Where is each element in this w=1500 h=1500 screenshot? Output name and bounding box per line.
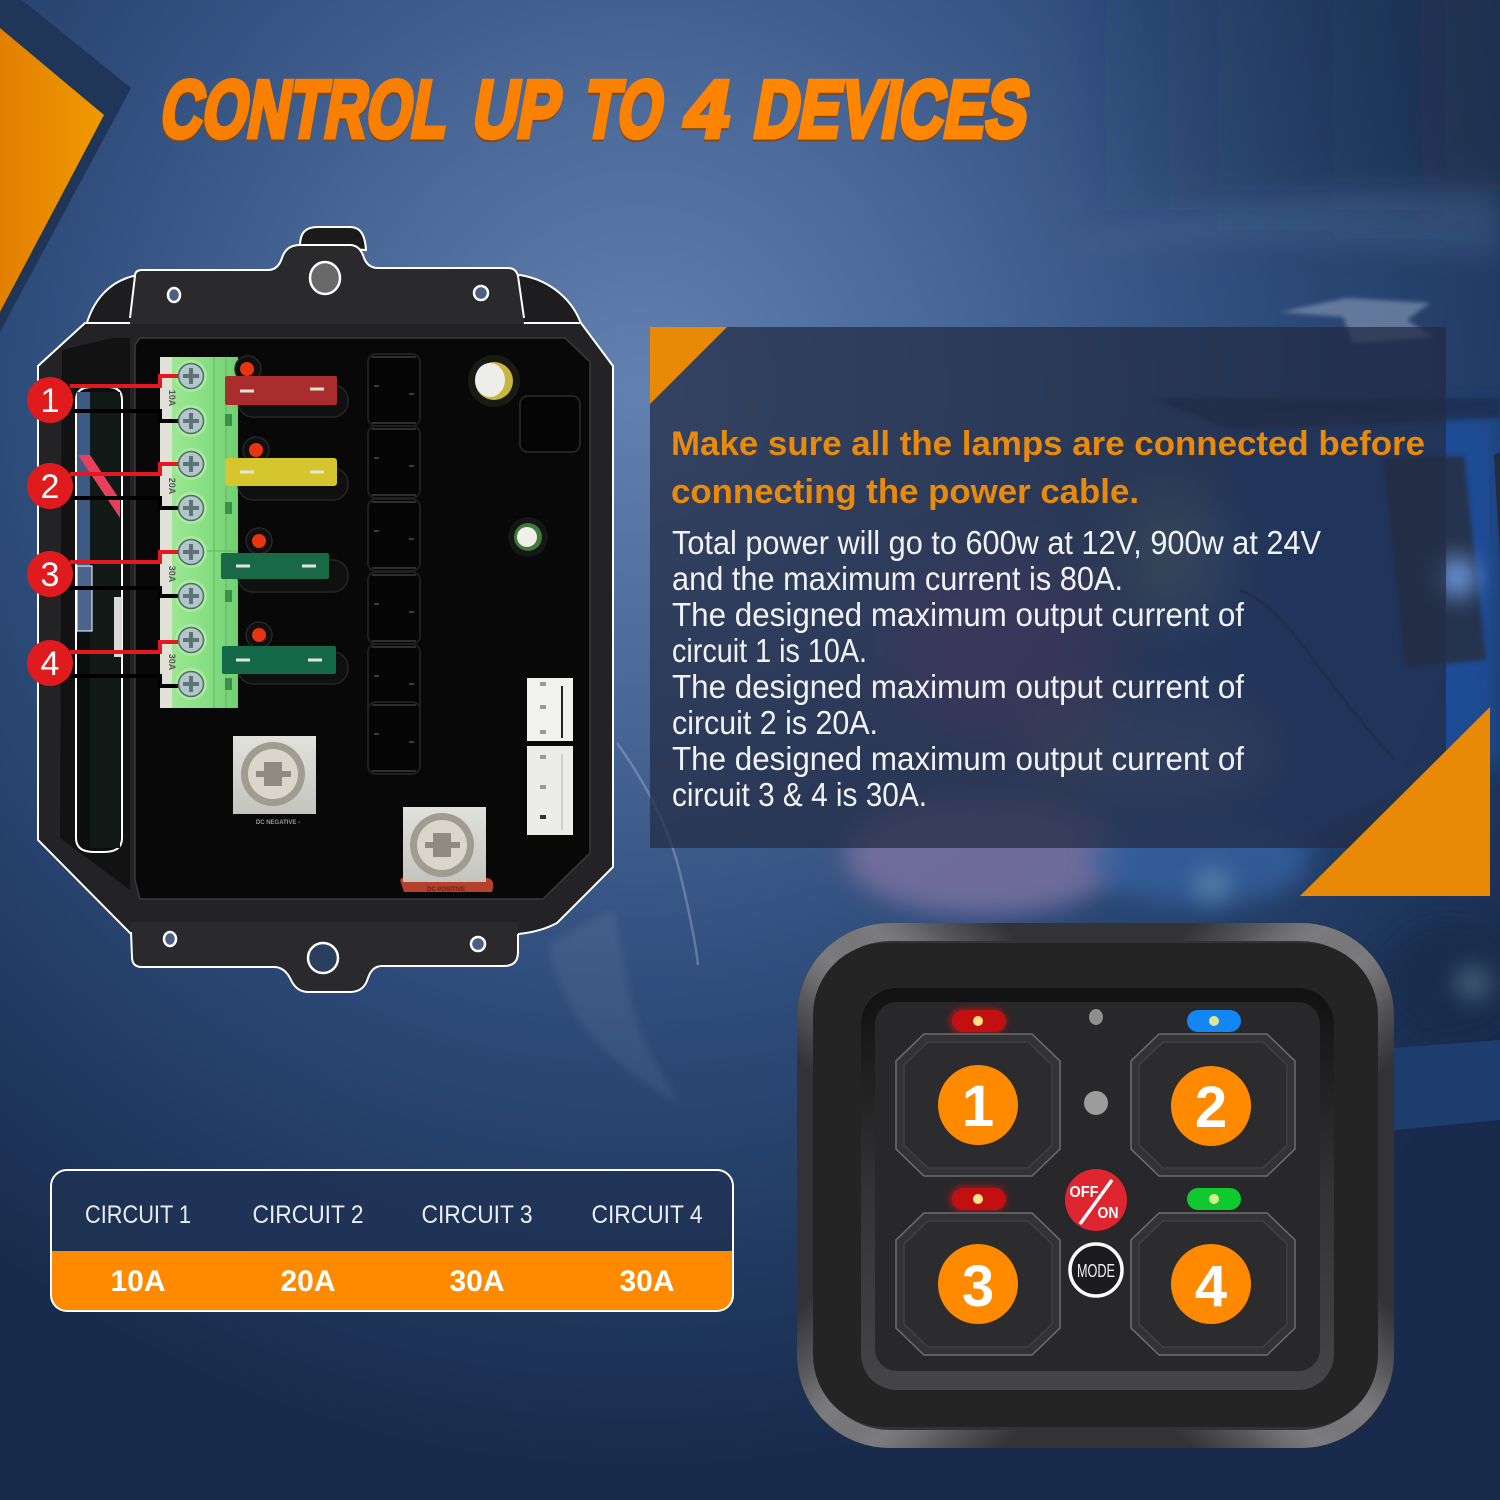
power specification text: The designed maximum output current of <box>672 596 1245 633</box>
circuit labels <box>85 1201 703 1229</box>
decorative corner arrow <box>0 0 131 332</box>
power specification text: and the maximum current is 80A. <box>672 560 1123 597</box>
power specification text: circuit 3 & 4 is 30A. <box>672 776 927 813</box>
small sensors <box>1084 1009 1108 1115</box>
circuit number badges <box>27 377 73 686</box>
orange corner triangle: bottom right <box>1300 707 1490 896</box>
mounting holes <box>164 262 488 973</box>
negative terminal: DC NEGATIVE - <box>256 820 300 826</box>
left slot <box>76 387 122 852</box>
button 4 <box>1131 1213 1295 1355</box>
title <box>154 65 1037 157</box>
circuit rating table <box>51 1170 733 1311</box>
circuit number badges: 1 <box>41 382 59 420</box>
current values: 20A <box>280 1265 336 1298</box>
button 3 <box>896 1213 1060 1355</box>
ears <box>85 275 583 330</box>
mode button <box>1070 1244 1122 1296</box>
button 4: 4 <box>1195 1254 1227 1319</box>
panel: power information <box>650 327 1490 896</box>
current values: 30A <box>619 1265 675 1298</box>
button 1 <box>896 1034 1060 1176</box>
potting compound <box>135 338 590 899</box>
recessed frame <box>861 988 1334 1390</box>
button 2: 2 <box>1195 1075 1227 1140</box>
positive terminal <box>400 807 493 893</box>
current values: 10A <box>110 1265 166 1298</box>
button panel <box>875 1002 1320 1371</box>
warning heading: connecting the power cable. <box>671 473 1139 511</box>
top tab <box>300 227 366 250</box>
power specification text <box>672 524 1321 813</box>
negative terminal <box>233 736 316 826</box>
title: DEVICES <box>747 67 1036 157</box>
off/on button: ON <box>1098 1205 1118 1222</box>
current values: 30A <box>449 1265 505 1298</box>
relay blocks <box>368 354 580 774</box>
title: 4 <box>677 67 737 157</box>
off/on button <box>1065 1169 1127 1231</box>
power specification text: circuit 2 is 20A. <box>672 704 878 741</box>
bezel <box>797 923 1394 1448</box>
circuit labels: CIRCUIT 3 <box>422 1201 532 1229</box>
capacitors <box>468 355 548 557</box>
background vehicle scene <box>550 0 1500 1130</box>
terminal block: 30A <box>167 654 177 671</box>
left recess <box>60 338 130 890</box>
circuit number badges: 4 <box>41 645 59 683</box>
control box photo <box>27 227 613 992</box>
terminal block: 10A <box>167 390 177 407</box>
circuit wires <box>70 376 178 686</box>
mode button: MODE <box>1077 1261 1115 1281</box>
power specification text: The designed maximum output current of <box>672 668 1245 705</box>
power specification text: Total power will go to 600w at 12V, 900w at 24V <box>672 524 1321 561</box>
terminal block <box>160 357 238 708</box>
bezel corner highlights <box>806 932 1385 1439</box>
title: UP <box>467 65 569 155</box>
housing body <box>38 323 613 934</box>
positive terminal: DC POSITIVE <box>427 887 465 893</box>
indicator lights <box>950 1009 1241 1211</box>
title: DEVICES <box>748 65 1037 155</box>
button 1: 1 <box>962 1074 994 1139</box>
off/on button: OFF <box>1070 1184 1099 1201</box>
panel background <box>650 327 1446 848</box>
terminal block: 20A <box>167 478 177 495</box>
warning heading: Make sure all the lamps are connected before <box>671 425 1425 463</box>
title: TO <box>578 65 672 155</box>
switch panel <box>797 923 1394 1448</box>
white connectors <box>527 678 573 835</box>
button 3: 3 <box>962 1254 994 1319</box>
warning heading <box>671 425 1425 511</box>
title: CONTROL <box>155 65 457 155</box>
table values row <box>51 1251 733 1311</box>
terminal block: 30A <box>167 566 177 583</box>
button 2 <box>1131 1034 1295 1176</box>
power specification text: The designed maximum output current of <box>672 740 1245 777</box>
power specification text: circuit 1 is 10A. <box>672 632 867 669</box>
title: TO <box>577 67 671 157</box>
table header <box>51 1170 733 1252</box>
current values <box>110 1265 675 1298</box>
title: CONTROL <box>154 67 456 157</box>
circuit labels: CIRCUIT 2 <box>252 1201 364 1229</box>
circuit number badges: 2 <box>41 468 59 506</box>
circuit labels: CIRCUIT 4 <box>592 1201 703 1229</box>
title: 4 <box>678 65 738 155</box>
orange corner triangle: top left <box>650 327 727 404</box>
mounting bracket <box>130 245 524 992</box>
circuit labels: CIRCUIT 1 <box>85 1201 191 1229</box>
circuit number badges: 3 <box>41 556 59 594</box>
fuses and LEDs <box>221 356 348 684</box>
title: UP <box>466 67 568 157</box>
